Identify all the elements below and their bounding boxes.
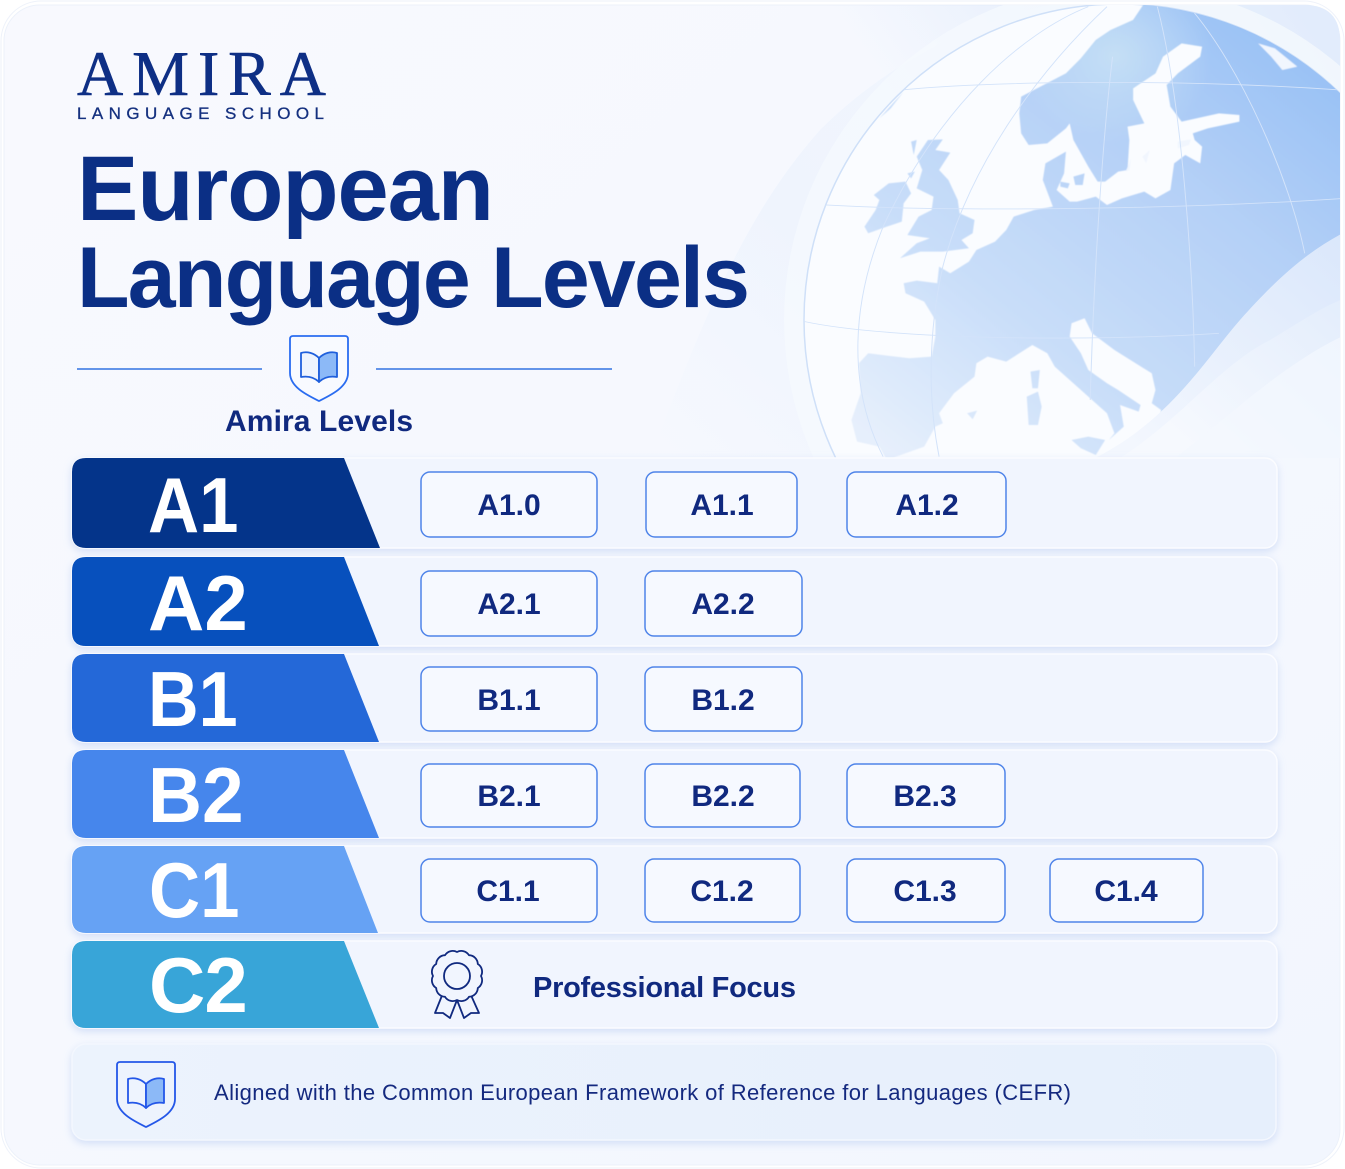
logo: Amira Language School: AMIRA (77, 38, 326, 109)
graticule (805, 7, 1345, 457)
subheading: Amira Levels: Amira Levels (225, 405, 413, 438)
row A1: A1.2 (895, 489, 959, 522)
row A2: A2 (148, 559, 248, 647)
row B2: B2.3 (893, 780, 957, 813)
row B2: B2.1 (477, 780, 541, 813)
mainland Europe (851, 0, 1345, 467)
row C1 (72, 846, 1277, 934)
row C1: C1.2 (690, 875, 754, 908)
row C1: C1 (149, 846, 240, 934)
icon: award ribbon (432, 951, 482, 1018)
row C2 (72, 941, 1277, 1029)
row B1: B1.1 (477, 684, 541, 717)
footer text: Aligned with the Common European Framework of Reference for Languages (CEFR) (214, 1080, 1071, 1105)
row C1: C1.4 (1094, 875, 1158, 908)
row B2 (72, 750, 1277, 839)
icon: shield with book (117, 1062, 175, 1127)
row A1: A1.1 (690, 489, 754, 522)
title: European (77, 138, 494, 240)
row C1: C1.1 (476, 875, 540, 908)
row A1: A1 (148, 461, 238, 549)
title (77, 138, 750, 326)
row C1: C1.3 (893, 875, 957, 908)
divider with shield icon (77, 336, 612, 401)
row A2 (72, 557, 1277, 647)
row A2: A2.1 (477, 588, 541, 621)
row A1: A1.0 (477, 489, 541, 522)
row A2: A2.2 (691, 588, 755, 621)
logo: Amira Language School: LANGUAGE SCHOOL (77, 104, 324, 123)
label: Professional Focus: Professional Focus (533, 972, 796, 1004)
row A1 (72, 458, 1277, 549)
title: Language Levels (77, 230, 750, 326)
row C2: C2 (149, 941, 248, 1029)
footer note (72, 1044, 1276, 1140)
row B1: B1.2 (691, 684, 755, 717)
row B1: B1 (148, 655, 238, 743)
row B1 (72, 654, 1277, 743)
row B2: B2.2 (691, 780, 755, 813)
row B2: B2 (148, 751, 244, 839)
globe and Europe map illustration (803, 5, 1340, 458)
